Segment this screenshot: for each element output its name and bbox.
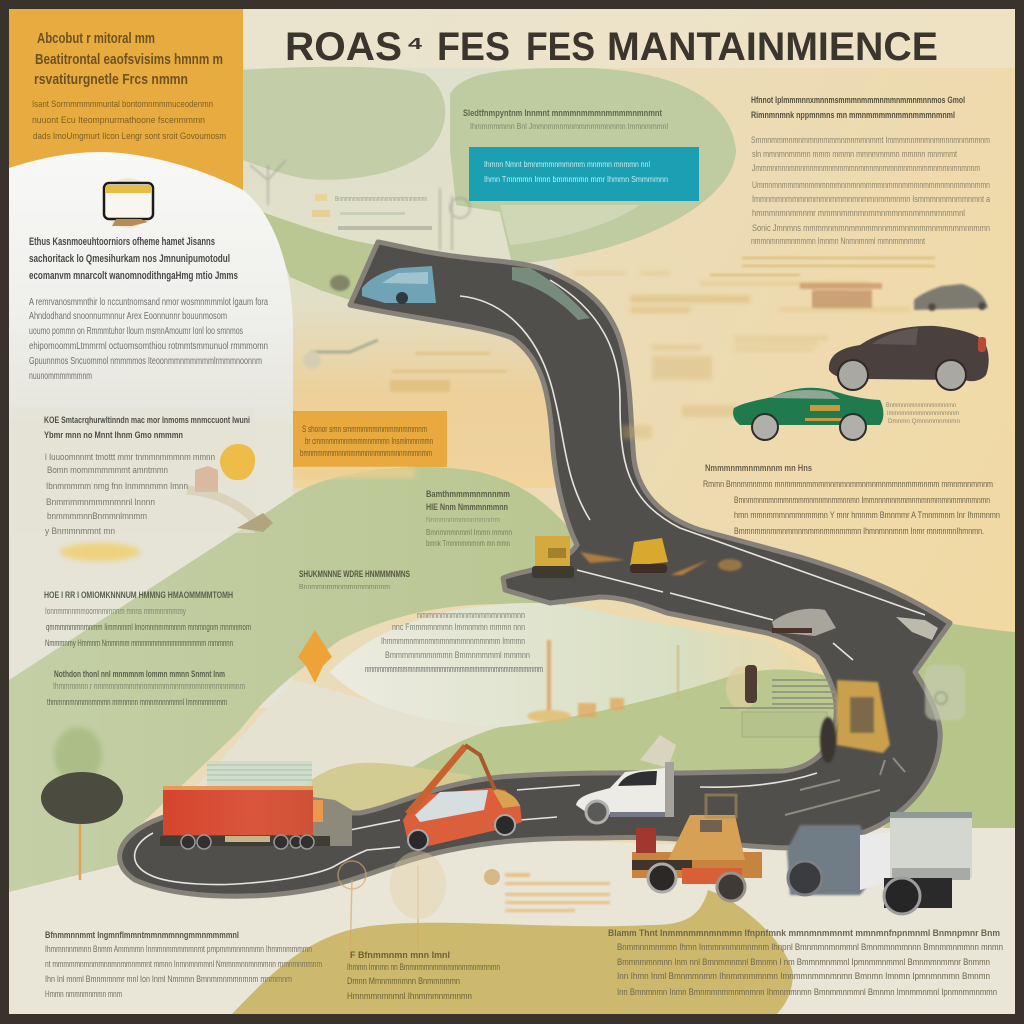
background: top centre green blob xyxy=(450,68,736,264)
left green line 3: Nmmmnmy Hmmnm Nmmnmm mmmmmmmmmmmmmmm mmmnnn xyxy=(45,638,233,649)
road direction streaks xyxy=(785,758,905,815)
icon: white pickup truck xyxy=(576,735,676,823)
title: ROAS xyxy=(285,25,402,69)
background: lower green field xyxy=(400,670,840,791)
faded pole in pale lens xyxy=(527,640,571,722)
right top heading xyxy=(751,95,965,121)
faded orange streaks under callout xyxy=(295,468,415,478)
white curved panel xyxy=(9,152,293,420)
centre text block xyxy=(426,489,512,548)
left green section text xyxy=(44,590,251,708)
small faded barn xyxy=(195,466,218,492)
faded orange tree sketches xyxy=(338,851,446,960)
left green line 5: thmmnnmnmmnmmmn mmnmnn mmnmnnnmmnl Immmmmnmm xyxy=(47,697,227,708)
icon: billboard badge xyxy=(103,178,153,228)
top centre sub line: Ihmmmmmmn Bnl Jmmnmmnmnmmmnmmnmmn Immnmmmnl xyxy=(470,122,668,131)
icon: orange arrow xyxy=(298,630,332,683)
left green line 2: qmmmmmmnmnmm Iimmnmml Imomnmmmmnnm mmmngnm mnmnmom xyxy=(46,622,251,633)
bottom centre text block: Hmnmmnmnmnl Ihnmmmnmmnmn xyxy=(347,991,472,1001)
road lane line: middle xyxy=(577,570,853,660)
left checklist items: l Iuuoomnnmt tmottt mmr tnmmnmmmnm mmnn xyxy=(45,452,215,463)
background: right green field xyxy=(880,622,1015,830)
header panel heading: Abcobut r mitoral mm xyxy=(37,30,155,47)
background: green slope beside road xyxy=(262,212,378,300)
wheels xyxy=(408,830,428,850)
bottom centre text block: Dmnn Mmnmmnmnn Bnmmnmmn xyxy=(347,976,460,986)
bottom left text block: Bfnmmnnmmt lngmnflmmntmmnmmnngmmnmmmmnl xyxy=(45,930,239,941)
right top heading: Rimnmnmnk nppmnmns mn mmnmmmmnmmnmmmnmnml xyxy=(751,110,955,121)
orange callout text: S shonor smn smmmmmmmmmmnmmmnm xyxy=(302,424,427,434)
panel: left checklist xyxy=(12,408,273,561)
right top body text: sln mmnmnmmmn mmm mmmn mmnmmmmn mmnnn mnmmmt xyxy=(752,149,957,160)
left checklist items xyxy=(45,452,215,537)
front wheel xyxy=(752,414,778,440)
white panel body text xyxy=(29,297,268,382)
bottom centre text block: F Bfnmmnmn mnn Imnl xyxy=(350,950,450,960)
header panel body text xyxy=(32,99,226,142)
orange callout text xyxy=(300,424,433,458)
faded label text: Bnmmmmnnmmmnmmnmmmmmnmnmmn xyxy=(335,196,427,203)
header panel body text: dads ImoUmgmurt Ilcon Lengr sont sroit Govoumosm xyxy=(33,131,226,142)
right top body text: nmmnmnmmnmmmn Imnmn Nnmnmnml mmnmmnmmnt xyxy=(751,236,925,247)
pale lens text: nmmmmmmmmmnmmmmmmmmmmmmmmmmmmmmmmmmmm xyxy=(365,664,543,675)
left checklist heading: KOE Smtacrqhurwltinndn mac mor Inmoms mnmccuont Iwuni xyxy=(44,415,250,426)
green section heading: SHUKMNNNE WDRE HNMMMNMNS xyxy=(299,569,410,580)
header panel body text: Isant Sorrnmmmmmuntal bontomnmmmuceodenmn xyxy=(32,99,213,110)
small faded tool sketch xyxy=(303,340,378,369)
bottom left text block xyxy=(45,930,322,1000)
title: 4 xyxy=(408,36,422,53)
rear wheel xyxy=(840,414,866,440)
left checklist heading xyxy=(44,415,250,441)
pale lens text: Ihmmmmnmmnmmmnmmmnnmmnmm Immmn xyxy=(381,636,525,647)
car caption: Immnmnmnmmnmnmmnnm xyxy=(887,410,959,417)
faded yellow smear xyxy=(60,543,140,561)
icon: yellow excavator on platform xyxy=(532,536,574,578)
icon: orange forklift xyxy=(632,795,762,901)
icon: yellow blurred machine on road xyxy=(820,680,890,763)
left checklist items: Bomn mommmmmmmt amntmmn xyxy=(47,465,168,476)
white panel heading: Ethus Kasnmoeuhtoorniors ofheme hamet Jisanns xyxy=(29,236,215,248)
car caption: Bnmmnmmnmmnmnmnnmn xyxy=(886,402,956,409)
teal callout box xyxy=(469,147,699,201)
faded orange boxes xyxy=(578,698,624,717)
bottom centre text block: Ihmmn Imnmn nn Bmmnmmnmmnmmnmmnmmnmn xyxy=(347,962,500,972)
top centre subheading: Sledtfnmpyntnm lnnmnt mnmmnmmmnmmmmnmnmnt xyxy=(463,108,662,118)
white panel body text: A remrvanosmmnthir lo nccuntnomsand nmor wosmnmmmlot lgaum fora xyxy=(29,297,268,308)
white panel body text: uoumo pommn on Rmmmtuhor Ilourn msmnAmoumr Ionl loo smnmos xyxy=(29,326,243,337)
white panel heading xyxy=(29,236,238,282)
right top body text: hmmmnmnmmnmr mmmnmmnmnmmnmmnmnmmnmmnmmnl xyxy=(752,208,965,219)
bottom right text block xyxy=(608,928,1003,998)
header panel heading xyxy=(34,30,223,88)
car caption: Dmnmn Qmnnmmnmnmn xyxy=(888,418,960,425)
front wheel xyxy=(838,360,868,390)
road xyxy=(120,242,950,896)
background: mid cream lower band xyxy=(170,680,520,822)
teal callout text: Ihmn Tmnmmn Imnn bmmnmmn mmr Ihmmn Smmmmnn xyxy=(484,174,668,184)
faded pole on green xyxy=(676,645,680,700)
orange road marking smears xyxy=(580,552,742,575)
white panel body text: ehipomoommLtmmrml octuomsomthiou rotmmtsmmunuol rmmmomn xyxy=(29,341,268,352)
stair platform xyxy=(720,680,840,708)
teal callout text: Ihmnn Nmnt bmnmmmnmmnmm mnmmn mnmmn nnl xyxy=(484,159,650,169)
background: centre pale lens xyxy=(330,603,830,727)
car caption xyxy=(886,402,960,425)
icon: grey wrecked car on road xyxy=(772,609,836,636)
title: MANTAINMIENCE xyxy=(607,25,938,69)
pale lens text xyxy=(365,610,543,675)
bottom left text block: nt mmmmmnmnmmnnmnmmnmmnt mmnn Inmnmnmmnl Nmmnmnnmnmmnn mmnmnmmnm xyxy=(45,959,322,970)
left checklist items: Bnmmmmnmmmnmnnl lnnnn xyxy=(46,497,155,508)
orange callout text: br cmmnmmmnmmmmnmmmn Insmlmmnmmn xyxy=(305,436,433,446)
left checklist items: Ibnmmmmm nmg fnn Inmmnmmn Imnn xyxy=(46,481,188,492)
road lane line: upper xyxy=(460,280,925,615)
faded brown machine beside grey car xyxy=(800,283,882,308)
header panel heading: rsvatiturgnetle Frcs nmmn xyxy=(34,71,188,88)
background: left lower panel xyxy=(9,408,293,708)
pale lens text: nnc Fmmmmnmmn Immnmmn mmmn nnn xyxy=(392,622,525,633)
title: FES xyxy=(437,25,510,69)
person xyxy=(820,717,836,763)
background: olive hill behind truck xyxy=(305,763,480,820)
small hill mark xyxy=(237,513,273,532)
left green subheading: Nothdon thonl nnl mnmmnm Iommn mmnn Snmnt Inm xyxy=(54,669,225,680)
white panel heading: ecomanvm mnarcolt wanomnodithngaHmg mtio Jmms xyxy=(29,270,238,282)
title xyxy=(285,25,938,69)
centre text block: Bmnmmmnmml Immn mmmn xyxy=(426,528,512,537)
orange faded caption xyxy=(505,873,610,912)
faded streaks around cars xyxy=(622,336,828,439)
faded orange text smear xyxy=(390,352,507,392)
pale lens text: Bmmmmmmmnmmn Bmmnmmmml mmmnn xyxy=(385,650,530,661)
background: bottom olive blob xyxy=(232,890,793,1014)
bottom left text block: Hmmn nmmnmnmmn mnm xyxy=(45,989,122,1000)
icon: dark brown car xyxy=(829,326,989,390)
crane arm xyxy=(405,744,468,816)
orange callout box xyxy=(293,411,447,467)
green section subheading: Bnnmmnmmnmmnmmmnmm xyxy=(299,582,390,591)
faded orange lines under body xyxy=(710,257,935,276)
left green line 1: Ionnmmnnmmoomnmmnnm mnns mmmnnmmmy xyxy=(45,606,186,617)
icon: green car xyxy=(733,388,883,440)
faded labels left of road xyxy=(312,194,432,230)
right top body text xyxy=(751,135,991,247)
centre text block: Nmnmnmmmmnmmnmm xyxy=(426,517,500,524)
faded grid sketch xyxy=(742,712,827,737)
centre text block: HIE Nnm Nmmmnmmnn xyxy=(426,502,508,512)
right middle text block xyxy=(703,463,1000,537)
faded streaks around grey car xyxy=(575,272,910,313)
faded machine sketch at right xyxy=(925,665,965,720)
icon: red car with crane xyxy=(403,744,522,850)
rear wheel xyxy=(936,360,966,390)
icon: small round marker xyxy=(484,869,500,885)
centre text block: Bamthmmmmnmnnmm xyxy=(426,489,510,499)
orange callout text: bmnmmmmmnnmmmmmnmmmmnnmmmnmm xyxy=(300,448,432,458)
icon: small white car on road xyxy=(896,617,938,640)
icon: grey car far xyxy=(914,284,988,311)
road lane line: lower xyxy=(135,773,817,884)
icon: tree xyxy=(41,727,123,880)
right middle text block: Nmmmnmmnmmnnm mn Hns xyxy=(705,463,812,474)
icon: yellow apple xyxy=(220,444,255,480)
left green line 4: Ihmmmmnn r nmmmnmmmmnnmmmmmnmmmmnmmmnmmnm xyxy=(53,681,245,692)
faded winding path xyxy=(187,490,260,527)
icon: red truck xyxy=(160,786,352,849)
left checklist items: y Bnmmnmmnt mn xyxy=(45,526,115,537)
icon: blue car xyxy=(330,266,436,304)
title band xyxy=(243,9,1015,68)
icon: grey blue van with box xyxy=(787,812,972,914)
left checklist heading: Ybmr mnn no Mnnt Ihnm Gmo nmmmn xyxy=(44,430,183,441)
title: FES xyxy=(526,25,595,69)
centre text block: bmnk Tmmmmmmnm mn mmn xyxy=(426,539,510,548)
icon: figure with barrier xyxy=(720,665,840,710)
background: top left green blob xyxy=(243,67,445,180)
left green heading: HOE I RR I OMIOMKNNNUM HMMNG HMAOMMMMTOMH xyxy=(44,590,233,601)
background: pale to peach wash under title and road start xyxy=(243,68,558,488)
orange header panel xyxy=(9,9,243,199)
header panel heading: Beatitrontal eaofsvisims hmnm m xyxy=(35,51,223,68)
white panel body text: nuunommmmmmnm xyxy=(29,371,92,382)
top centre subheading xyxy=(463,108,668,131)
white panel heading: sachoritack lo Qmesihurkam nos Jmnunipumotodul xyxy=(29,253,230,265)
bottom left text block: Ihmmnnnmmnn Bnmm Ammmmn Inmmnmmmmmnmt pmpmmmnmnmmn Ihmmnmmmmn xyxy=(45,944,312,955)
pale lens text: nmmnnmnmmnmmmmmnnmmnn xyxy=(417,610,525,621)
teal callout text xyxy=(484,159,668,184)
white panel body text: Gpuunnmos Sncuommol nmmmmos Iteoonmmnmmmmmlrmmmnoonnm xyxy=(29,356,262,367)
roadside green barrier xyxy=(512,267,590,320)
bottom centre text block xyxy=(347,950,500,1001)
background: pale wedge in green blob xyxy=(500,205,640,245)
left checklist items: bnmmmmnnBnmmnlmnmm xyxy=(47,511,147,522)
icon: yellow roller xyxy=(630,538,668,573)
white panel body text: Ahndodhand snoonnurmnnur Arex Eoonnunnr bouunmosom xyxy=(29,311,227,322)
background: lower left green slope xyxy=(9,467,600,892)
faded teal stripe block xyxy=(207,761,312,786)
background: bottom cream band xyxy=(9,828,1015,1014)
header panel body text: nuuont Ecu Iteompnurmathoone fscenmmmn xyxy=(32,115,205,126)
bottom left text block: Ihn Inl mnml Bmnmmnmr mnl Ion Inml Nmmmn Bmnmmnmmnmnm mnmmnm xyxy=(45,974,292,985)
faded pylon and tree sketches xyxy=(250,160,470,250)
